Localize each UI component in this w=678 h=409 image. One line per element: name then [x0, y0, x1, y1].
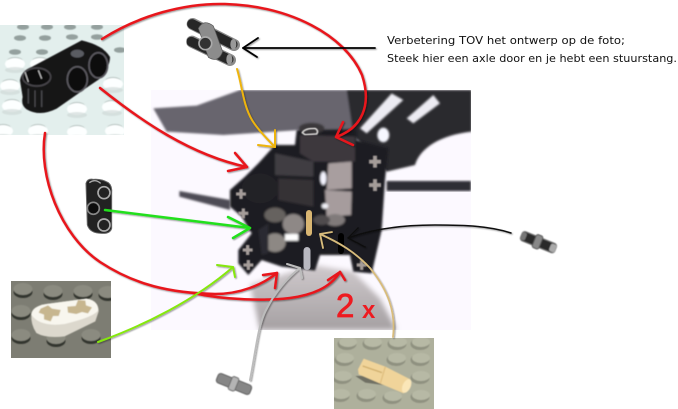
- icon: black beam part: [86, 179, 112, 233]
- icon: double pin part: [191, 23, 236, 65]
- label: multiplication x: x: [362, 297, 376, 324]
- icon: black pin: [519, 229, 558, 256]
- arrow: black pin: [348, 225, 511, 247]
- arrow: orange: [237, 69, 275, 147]
- arrow: black to double pin: [243, 38, 375, 57]
- text block: note: Steek hier een axle door en je hebt een stuurstang.: [387, 52, 677, 65]
- text block: note: [387, 34, 677, 65]
- label: 2 x: 2: [336, 287, 354, 324]
- text block: note: Verbetering TOV het ontwerp op de foto;: [387, 34, 625, 47]
- arrow: lime: [98, 265, 235, 342]
- arrow: red lower branch one: [44, 133, 277, 294]
- icon: grey pin: [215, 371, 253, 397]
- thumbnail: white liftarm on grey plate: [11, 281, 118, 358]
- arrow: tan pin: [320, 232, 394, 337]
- arrow: red to upper model: [100, 88, 247, 171]
- photo background: [153, 90, 472, 330]
- thumbnail: black connector on light plate: [0, 24, 126, 141]
- arrow: red lower branch two: [193, 272, 345, 300]
- arrow: red top arc: [102, 4, 366, 145]
- marker bars: [304, 210, 344, 270]
- photo: assembled model: [151, 90, 472, 330]
- arrow: green: [105, 210, 250, 238]
- arrow: grey pin: [250, 264, 302, 380]
- photo: model body: [230, 123, 389, 275]
- thumbnail: tan pin on grey plate: [330, 337, 434, 409]
